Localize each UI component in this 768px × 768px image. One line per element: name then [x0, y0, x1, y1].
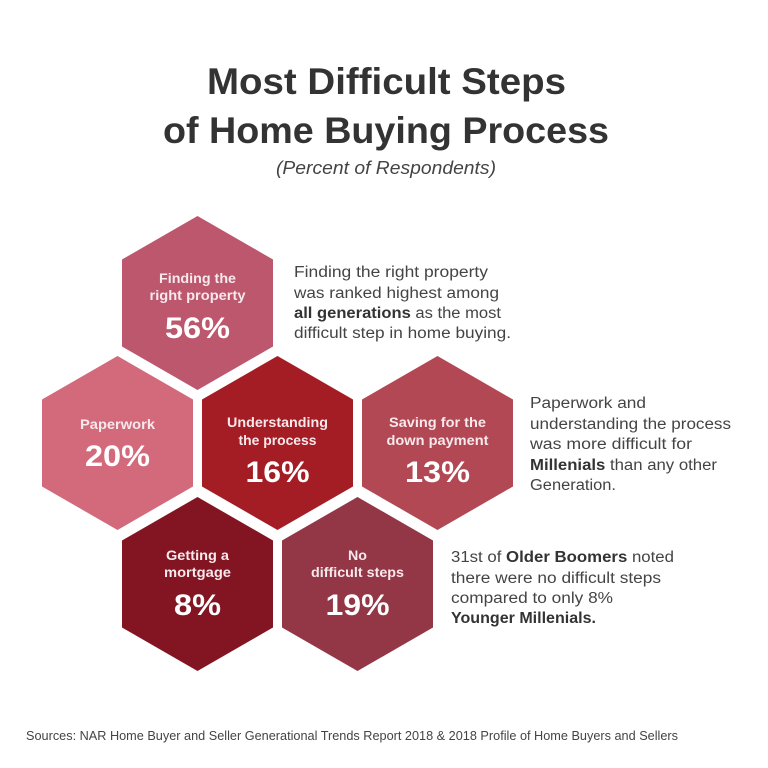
- hexagon: understanding the process: the process: [238, 432, 317, 448]
- text block: older boomers: 31st of Older Boomers noted: [451, 549, 674, 566]
- hexagon: paperwork: [42, 356, 193, 530]
- hexagon: finding the right property: right property: [150, 287, 246, 303]
- text block: finding the right property: Finding the right property: [294, 264, 488, 281]
- title: of Home Buying Process: [163, 110, 609, 151]
- hexagon: finding the right property: [122, 216, 273, 390]
- hexagon: getting a mortgage: Getting a: [166, 547, 229, 563]
- hexagon: paperwork: Paperwork: [80, 416, 155, 432]
- text block: paperwork and understanding: Millenials than any other: [530, 457, 717, 474]
- hexagon: finding the right property: Finding the: [159, 270, 236, 286]
- hexagon: getting a mortgage: 8%: [174, 589, 221, 622]
- hexagon: no difficult steps: difficult steps: [311, 564, 404, 580]
- hexagon: finding the right property: 56%: [165, 312, 230, 345]
- hexagon: getting a mortgage: [122, 497, 273, 671]
- text block: paperwork and understanding: understanding the process: [530, 416, 731, 433]
- hexagon: no difficult steps: [282, 497, 433, 671]
- text block: paperwork and understanding: Paperwork and: [530, 395, 646, 412]
- text block: finding the right property: [293, 264, 511, 342]
- text block: finding the right property: all generations as the most: [294, 305, 502, 322]
- text block: older boomers: [451, 549, 674, 627]
- text block: older boomers: Younger Millenials.: [451, 610, 596, 627]
- text block: older boomers: compared to only 8%: [451, 590, 613, 607]
- hexagon: saving for the down payment: [362, 356, 513, 530]
- hexagon: saving for the down payment: 13%: [405, 456, 470, 489]
- hexagon: understanding the process: Understanding: [227, 414, 328, 430]
- hexagon: saving for the down payment: Saving for the: [389, 414, 486, 430]
- text block: finding the right property: difficult step in home buying.: [294, 325, 511, 342]
- text block: finding the right property: was ranked highest among: [293, 285, 499, 302]
- hexagon: understanding the process: 16%: [246, 456, 310, 489]
- title: Most Difficult Steps: [207, 61, 566, 102]
- text block: paperwork and understanding: [529, 395, 731, 494]
- hexagon: no difficult steps: 19%: [326, 589, 390, 622]
- text block: paperwork and understanding: Generation.: [530, 477, 616, 494]
- sources: Sources: NAR Home Buyer and Seller Generational Trends Report 2018 & 2018 Profile of Home Buyers and Sellers: [26, 729, 678, 743]
- text block: older boomers: there were no difficult steps: [451, 570, 661, 587]
- hexagon: saving for the down payment: down payment: [386, 432, 489, 448]
- text block: paperwork and understanding: was more difficult for: [529, 436, 692, 453]
- hexagon: getting a mortgage: mortgage: [164, 564, 231, 580]
- title: [163, 61, 609, 151]
- subtitle: (Percent of Respondents): [276, 157, 496, 178]
- hexagon: no difficult steps: No: [348, 547, 367, 563]
- hexagon: understanding the process: [202, 356, 353, 530]
- hexagon: paperwork: 20%: [85, 440, 150, 473]
